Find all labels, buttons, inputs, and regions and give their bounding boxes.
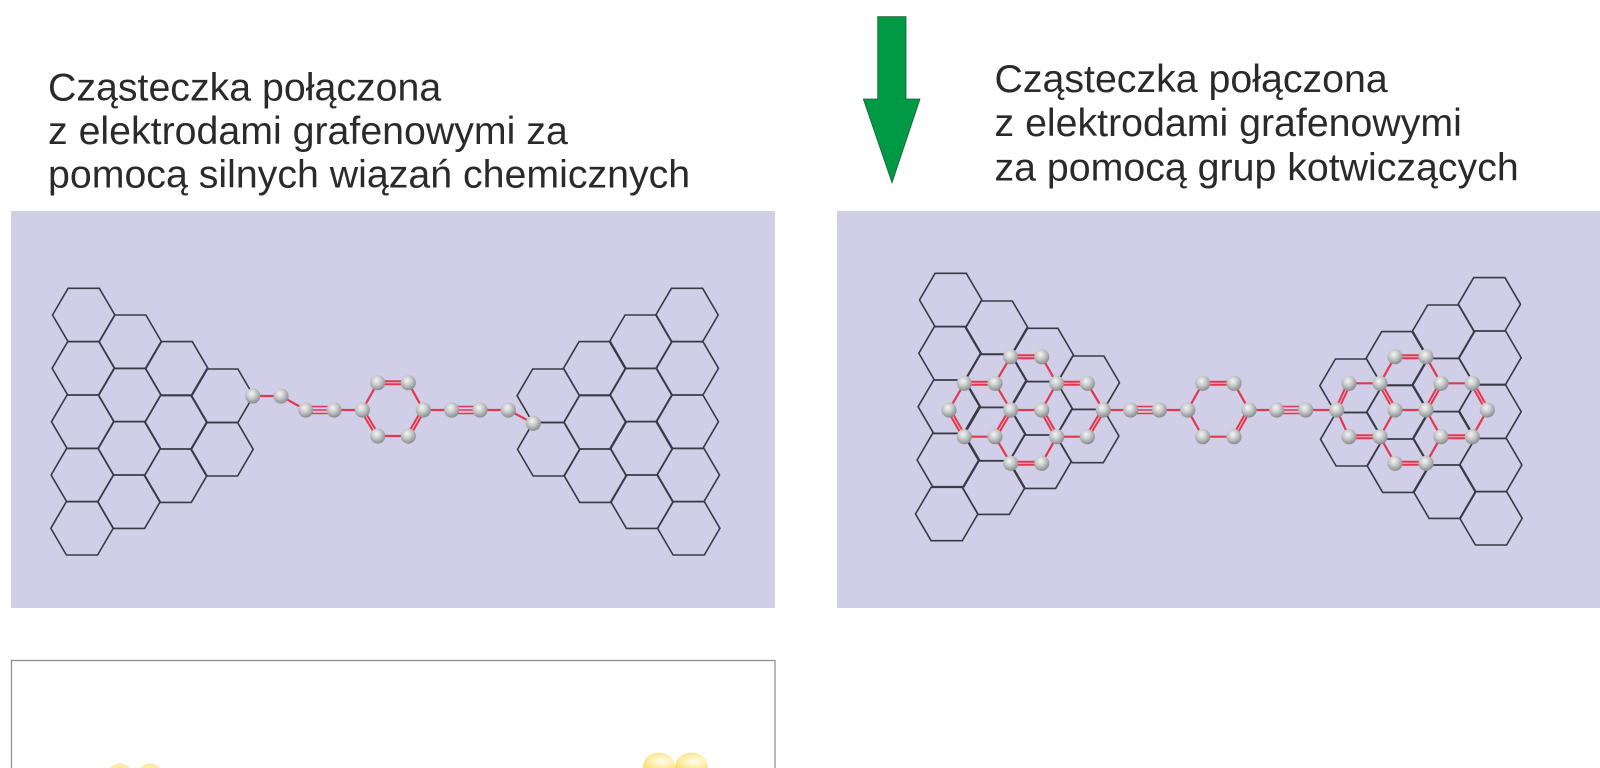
panel: gold electrodes frame — [12, 660, 775, 768]
molecule bonds — [253, 383, 533, 436]
molecule atoms — [941, 349, 1495, 471]
right gold atoms — [643, 753, 708, 768]
left heading: pomocą silnych wiązań chemicznych — [48, 152, 690, 196]
molecule atoms — [245, 375, 541, 444]
left gold atoms — [110, 764, 160, 768]
panel: molecule with strong chemical bonds — [11, 211, 775, 608]
left heading: z elektrodami grafenowymi za — [48, 109, 568, 153]
panel: molecule with anchor groups — [837, 211, 1600, 608]
right heading: za pomocą grup kotwiczących — [994, 146, 1519, 190]
molecule bonds — [949, 357, 1487, 463]
right graphene electrode — [517, 288, 720, 555]
right heading: Cząsteczka połączona — [994, 57, 1388, 101]
right heading: z elektrodami grafenowymi — [994, 101, 1462, 145]
left graphene electrode — [916, 273, 1120, 541]
right graphene electrode — [1320, 278, 1522, 545]
left heading: Cząsteczka połączona — [48, 66, 441, 110]
left graphene electrode — [51, 288, 253, 555]
icon: green down arrow — [863, 17, 920, 183]
